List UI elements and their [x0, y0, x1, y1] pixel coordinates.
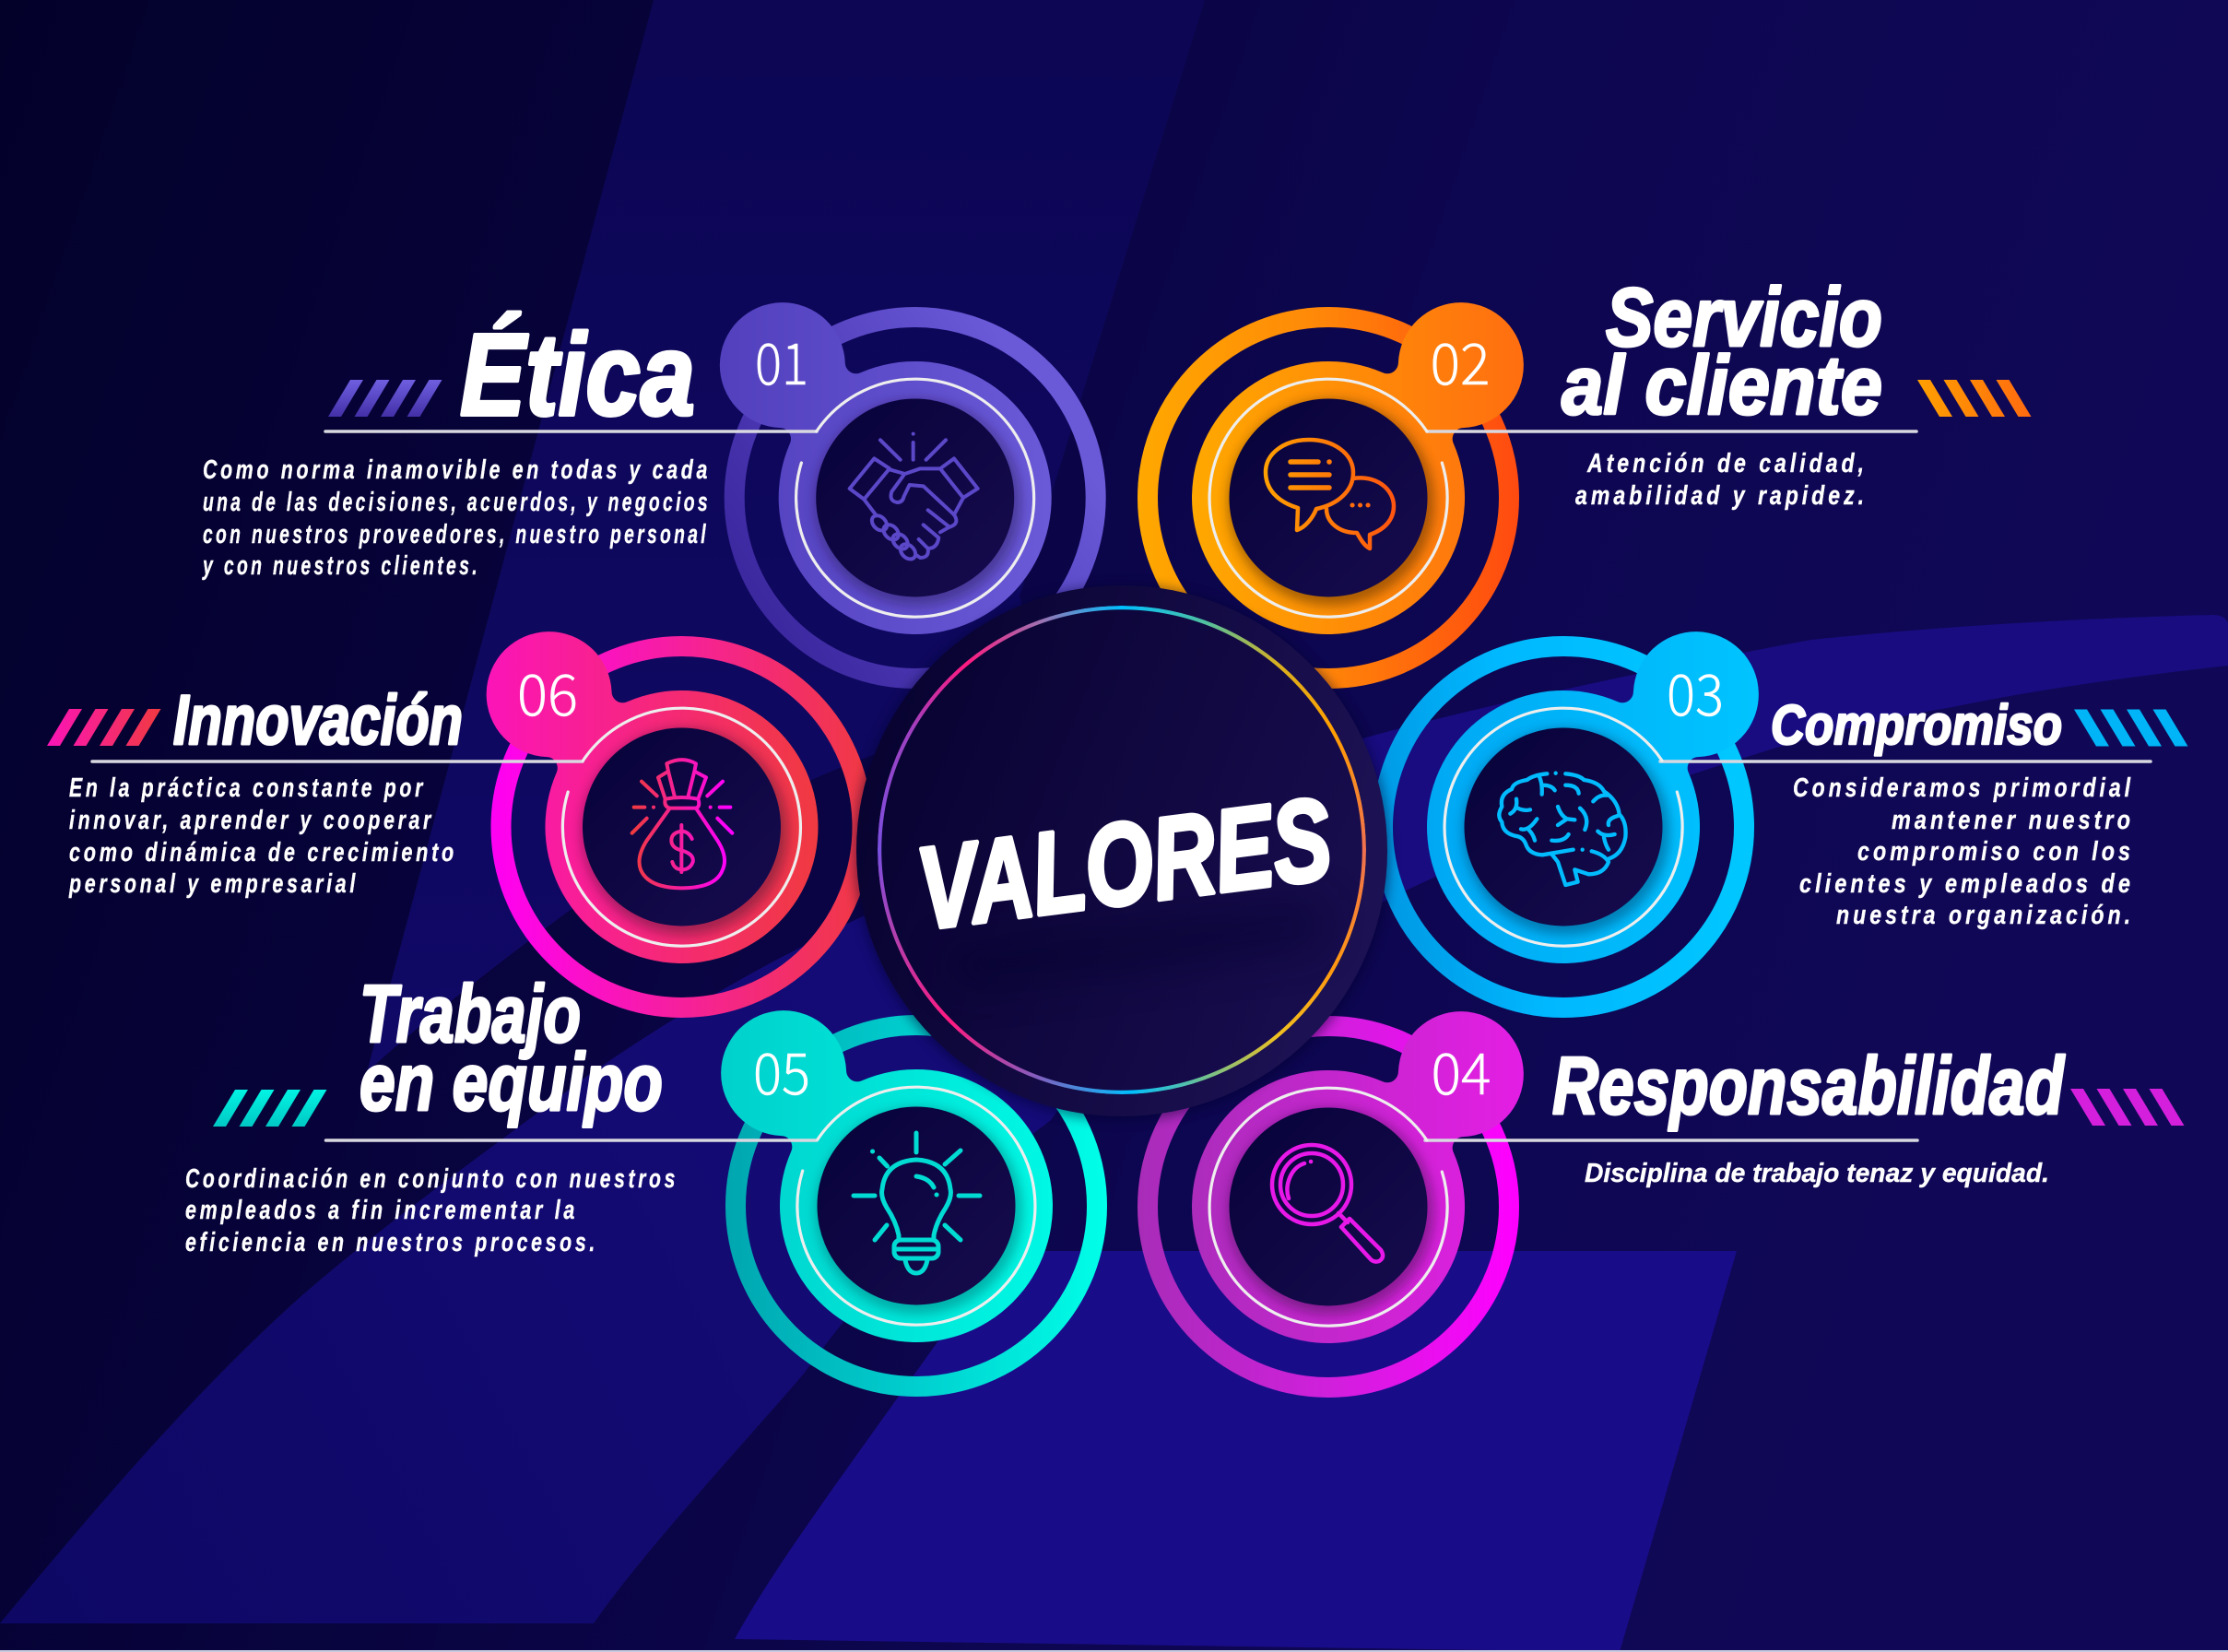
heading: Innovación: Innovación — [173, 681, 463, 760]
number 05: 05 — [753, 1028, 810, 1111]
text: Trabajo description: empleados a fin incrementar la — [185, 1196, 578, 1225]
stripes 04 — [2070, 1089, 2185, 1126]
text: Ética description: una de las decisiones, acuerdos, y negocios — [203, 488, 711, 517]
stripes 06 — [47, 709, 160, 746]
text: Innovación description — [68, 773, 457, 899]
number 01: 01 — [755, 318, 808, 401]
heading: Servicio al cliente: al cliente — [1562, 340, 1882, 432]
panel: 03 Compromiso — [1383, 631, 2188, 1008]
text: Servicio description — [1575, 449, 1868, 511]
number 02: 02 — [1431, 318, 1490, 401]
heading: Trabajo en equipo — [360, 968, 663, 1127]
stripes 01 — [328, 380, 442, 417]
text: Ética description: y con nuestros clientes. — [202, 551, 480, 581]
rings and badge 02 — [1148, 302, 1524, 678]
heading: Trabajo en equipo: en equipo — [360, 1036, 663, 1127]
text: Compromiso description: mantener nuestro — [1892, 806, 2134, 835]
panel: 06 Innovación — [47, 631, 863, 1008]
text: Innovación description: personal y empresarial — [68, 869, 359, 899]
icon: brain — [1499, 773, 1626, 885]
text: Servicio description: amabilidad y rapidez. — [1575, 481, 1868, 511]
icon: chat bubbles — [1266, 440, 1394, 549]
divider line and white arc 03 — [1444, 708, 2151, 946]
icon: magnifying glass — [1272, 1145, 1383, 1262]
panel: 05 Trabajo en equipo — [185, 968, 1097, 1386]
text: Servicio description: Atención de calidad, — [1586, 449, 1868, 478]
heading: Servicio al cliente: Servicio — [1606, 272, 1882, 364]
rings and badge 01 — [720, 302, 1096, 678]
divider line and white arc 01 — [325, 379, 1034, 617]
number 06: 06 — [517, 649, 578, 732]
text: Compromiso description: compromiso con los — [1857, 837, 2134, 867]
text: Trabajo description: eficiencia en nuestros procesos. — [185, 1228, 598, 1257]
text: Trabajo description — [185, 1164, 678, 1257]
divider line and white arc 05 — [326, 1087, 1035, 1325]
heading: Trabajo en equipo: Trabajo — [360, 968, 581, 1059]
panel: 01 Ética — [202, 302, 1096, 678]
stripes 03 — [2074, 710, 2188, 747]
text: Innovación description: innovar, aprender y cooperar — [69, 806, 434, 835]
heading: Ética: Ética — [460, 310, 695, 440]
rings and badge 05 — [721, 1010, 1097, 1386]
text: Ética description: Como norma inamovible en todas y cada — [203, 455, 711, 485]
heading: Servicio al cliente — [1562, 272, 1882, 432]
number 03: 03 — [1667, 649, 1724, 732]
text: Innovación description: En la práctica constante por — [69, 773, 426, 803]
text: Compromiso description: clientes y empleados de — [1799, 869, 2134, 899]
stripes 05 — [213, 1090, 326, 1127]
panel: 04 Responsabilidad — [1148, 1011, 2185, 1387]
rings and badge 04 — [1148, 1011, 1524, 1387]
rings and badge 06 — [487, 631, 863, 1008]
divider line and white arc 02 — [1209, 379, 1916, 617]
text: Ética description: con nuestros proveedores, nuestro personal — [203, 520, 709, 549]
rings and badge 03 — [1383, 631, 1759, 1008]
divider line and white arc 06 — [92, 708, 800, 946]
text: Innovación description: como dinámica de crecimiento — [69, 838, 457, 867]
text: Ética description — [202, 455, 711, 581]
text: Trabajo description: Coordinación en conjunto con nuestros — [185, 1164, 678, 1194]
icon: handshake — [850, 434, 978, 562]
center rainbow ring — [878, 606, 1366, 1094]
stripes 02 — [1917, 380, 2032, 417]
icon: light bulb — [854, 1133, 980, 1273]
divider line and white arc 04 — [1209, 1088, 1917, 1326]
heading: Compromiso: Compromiso — [1771, 694, 2062, 756]
text: Responsabilidad description: Disciplina de trabajo tenaz y equidad. — [1585, 1159, 2049, 1188]
icon: money bag — [632, 760, 732, 888]
center title: VALORES: VALORES — [911, 773, 1338, 954]
center disc — [854, 584, 1390, 1121]
heading: Responsabilidad: Responsabilidad — [1552, 1040, 2066, 1131]
text: Compromiso description — [1793, 773, 2134, 930]
number 04: 04 — [1431, 1028, 1491, 1111]
text: Compromiso description: nuestra organización. — [1836, 901, 2134, 930]
panel: 02 Servicio al cliente — [1148, 272, 2032, 678]
text: Compromiso description: Consideramos primordial — [1793, 773, 2134, 803]
